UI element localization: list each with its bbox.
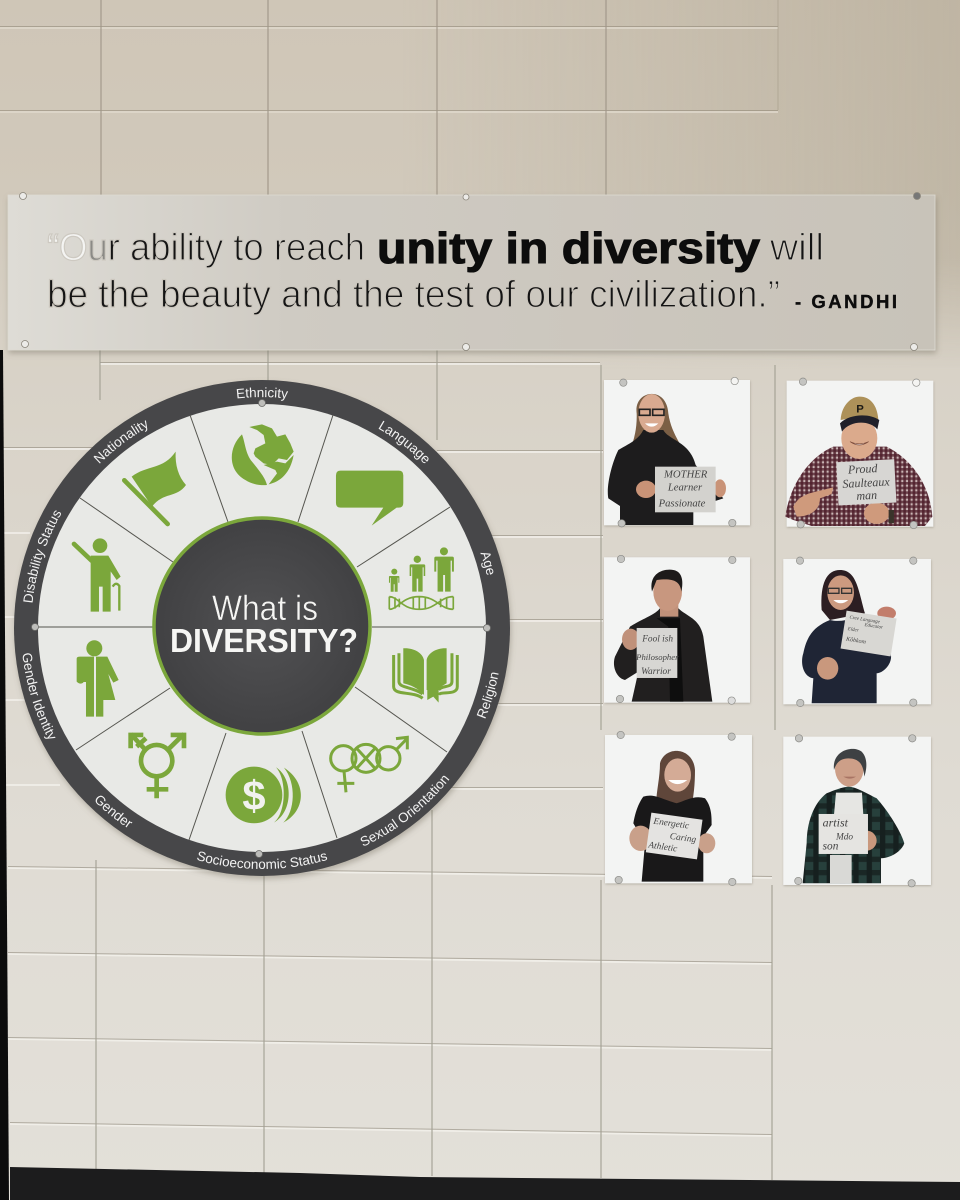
photo card: Cree language educator: Kôhkom [845,636,867,646]
photo card: Energetic Caring Athletic: Caring [669,832,697,845]
quote bold emphasis: unity in diversity [377,224,761,273]
photo edge at left [0,350,9,1200]
photo card: Proud Saulteaux man: man [856,488,877,503]
photo card: Fool Philosopher Warrior: Warrior [641,667,671,677]
photo card: Proud Saulteaux man: Proud [847,461,879,477]
icon: gender identity person [77,640,119,717]
photo card: Mother Learner Passionate [604,377,750,527]
icon: sexual orientation symbol [331,737,407,792]
label: Gender Identity: Gender Identity [22,653,56,739]
label: Socioeconomic Status: Socioeconomic Status [197,852,328,869]
label: Age: Age [480,552,494,575]
label: Ethnicity: Ethnicity [236,387,288,401]
quote word will: will [769,227,824,269]
photo card: Proud Saulteaux man: Saulteaux [842,474,891,491]
diversity wheel [12,380,514,882]
icon: transgender symbol [131,734,184,798]
photo card: Mother Learner Passionate: Learner [667,483,703,494]
icon: three people and DNA [389,547,454,609]
label: Language: Language [378,420,428,464]
attribution: - GANDHI [795,291,897,312]
photo card: Cree language educator: Educator [863,623,883,631]
photo card: Fool Philosopher Warrior: Fool ish [641,635,673,645]
wheel outer ring [14,380,510,876]
label: Disability Status: Disability Status [23,510,61,602]
icon: speech bubble [336,471,403,526]
photo card: Energetic Caring Athletic: Athletic [647,840,679,855]
photo card: Artist Mdo Son [783,735,931,887]
hub title [170,589,358,659]
hub title: What is [212,589,318,628]
photo card: Artist Mdo Son: artist [823,816,849,830]
quote line two: be the beauty and the test of our civilization.” [47,274,780,316]
photo card: Cree language educator [783,557,931,707]
photo card: Fool Philosopher Warrior: Philosopher [635,652,679,662]
wheel screws [32,400,490,858]
photo card: Energetic Caring Athletic: Energetic [652,817,691,832]
photo card: Cree language educator: Cree Language [849,616,881,625]
photo card: Mother Learner Passionate: Passionate [658,499,706,510]
photo card: Artist Mdo Son: son [823,840,839,852]
label: Gender: Gender [96,796,132,828]
hub circle [154,518,370,734]
ring labels [22,387,499,869]
concrete block mortar lines [0,0,778,1180]
wheel spokes [38,415,487,840]
icon: flag [124,452,186,524]
label: Religion: Religion [476,672,499,718]
photo card: Proud Saulteaux man: P [856,403,864,415]
photo card: Artist Mdo Son: Mdo [835,832,853,842]
icon: dollar coin: $ [242,772,266,819]
label: Nationality: Nationality [94,420,148,464]
photo card: Energetic Caring Athletic [605,731,752,886]
panel standoff screws [20,192,920,350]
photo card: Cree language educator: Elder [846,627,859,634]
icon: elder person with cane [74,538,121,612]
wheel white face [38,404,486,852]
photo card: Fool Philosopher Warrior [604,555,750,704]
quote line one: “Our ability to reach [47,227,365,269]
black floor strip [10,1167,960,1200]
icon: globe [232,424,294,485]
label: Sexual Orientation: Sexual Orientation [360,776,450,846]
hub title: DIVERSITY? [170,622,358,659]
icon: dollar coin [226,767,301,823]
photo card: Proud Saulteaux man [785,378,933,529]
quote panel [8,192,935,350]
photo card: Mother Learner Passionate: MOTHER [663,469,708,480]
icon: open book [394,648,457,703]
